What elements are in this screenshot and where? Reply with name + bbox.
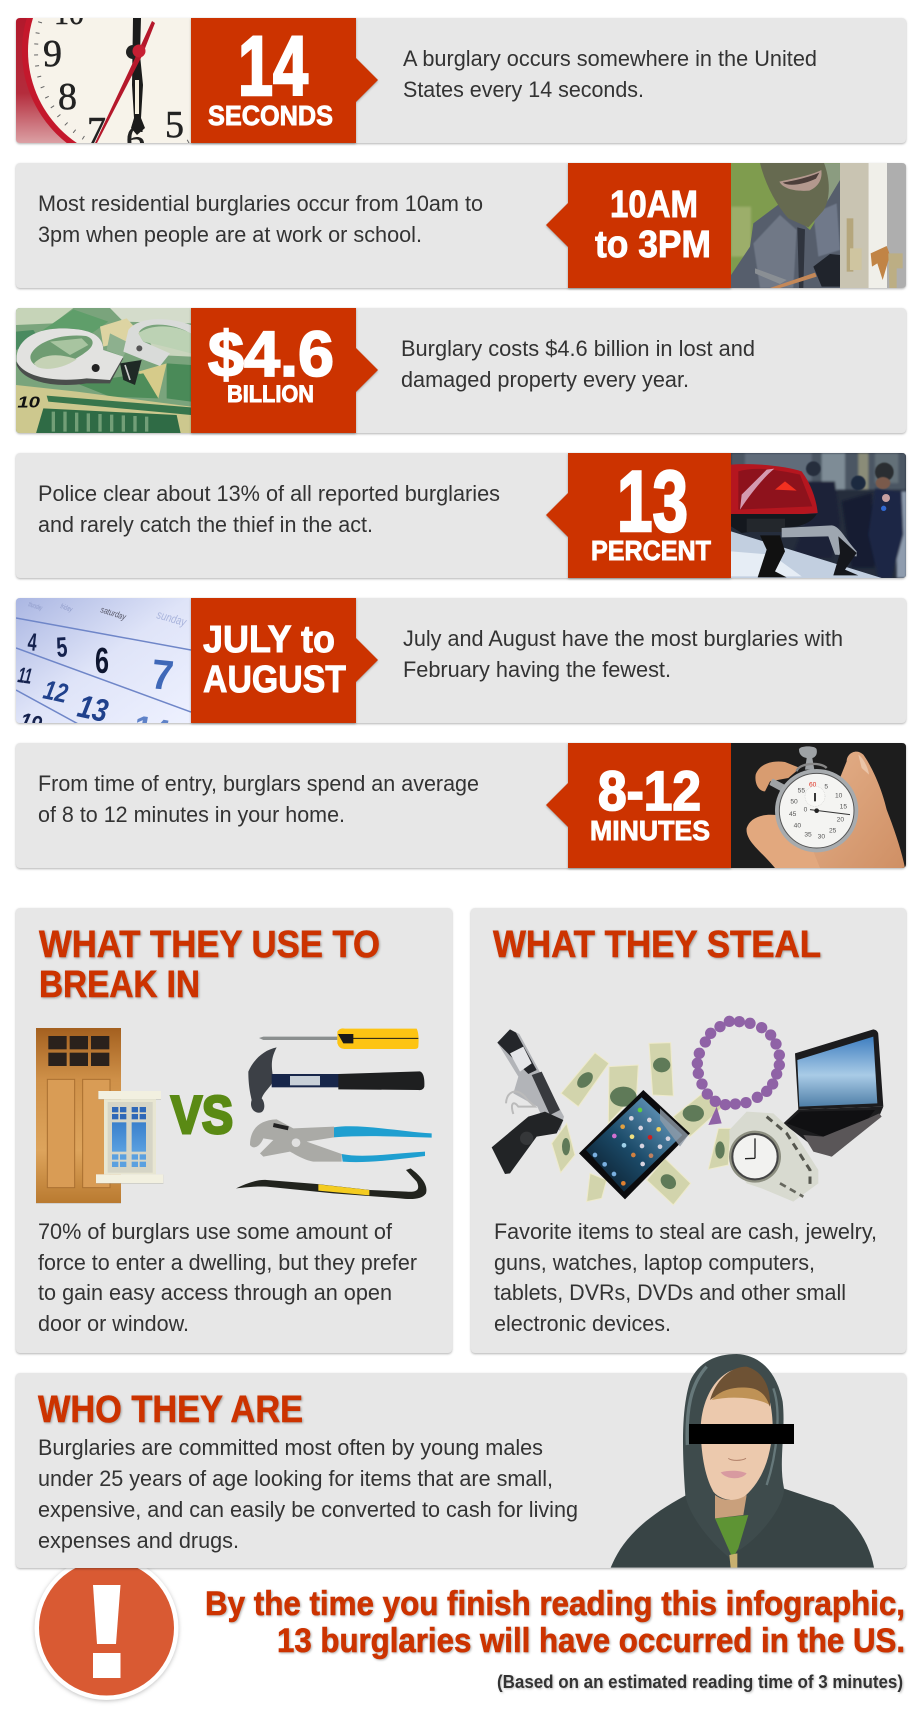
photo: stopwatch in hand: 35: [804, 831, 812, 838]
badge: 4.6 billion: [191, 308, 378, 433]
photo: calendar page: 19: [17, 708, 45, 739]
text: profile of burglars: expensive, and can easily be converted to cash for living: [38, 1497, 578, 1522]
text: time of day: 3pm when people are at work or school.: [38, 222, 422, 247]
photo: stopwatch in hand: 40: [794, 822, 801, 829]
photo: stopwatch in hand: 55: [798, 788, 805, 795]
text: use of force: [38, 1219, 417, 1336]
badge: 14 seconds: SECONDS: [208, 100, 333, 131]
illustration: stolen items: [492, 1016, 883, 1205]
heading: what they steal: WHAT THEY STEAL: [493, 924, 821, 966]
text: burglary frequency: States every 14 seconds.: [403, 77, 644, 102]
icon: exclamation circle: [34, 1556, 178, 1700]
text: peak months: July and August have the most burglaries with: [403, 626, 843, 651]
text: cost of burglary: Burglary costs $4.6 billion in lost and: [401, 336, 755, 361]
photo: stopwatch in hand: 60: [809, 781, 817, 788]
photo: handcuffs on money: [16, 308, 191, 433]
photo: stopwatch in hand: 30: [818, 834, 825, 841]
text: peak months: [403, 626, 843, 682]
text: favourite items: electronic devices.: [494, 1311, 671, 1336]
photo: masked burglar at door: [731, 163, 906, 288]
photo: calendar page: 11: [16, 662, 34, 689]
text: time of day: Most residential burglaries occur from 10am to: [38, 191, 483, 216]
text: favourite items: guns, watches, laptop computers,: [494, 1250, 815, 1275]
photo: stopwatch in hand: 45: [789, 811, 797, 818]
badge: 8-12 minutes: 8-12: [598, 759, 701, 822]
text: police clearance: Police clear about 13% of all reported burglaries: [38, 481, 500, 506]
text: police clearance: and rarely catch the thief in the act.: [38, 512, 373, 537]
photo: police light and officers: [731, 453, 907, 578]
badge: 8-12 minutes: [546, 743, 731, 868]
photo: calendar page: sunday: [155, 607, 189, 629]
photo: red wall clock: 5: [165, 104, 184, 146]
heading: who they are: WHO THEY ARE: [38, 1389, 303, 1431]
text: time inside home: of 8 to 12 minutes in your home.: [38, 802, 345, 827]
text: vs: VS: [171, 1086, 233, 1145]
badge: 10am to 3pm: to 3PM: [595, 224, 711, 266]
text: cost of burglary: [401, 336, 755, 392]
panel: 4.6 billion: [16, 308, 906, 433]
photo: red wall clock: 6: [126, 119, 145, 161]
photo: calendar page: 5: [55, 631, 68, 663]
panel: who they are: [16, 1354, 906, 1568]
photo: calendar page: 4: [26, 628, 38, 657]
photo: stopwatch in hand: [731, 743, 906, 868]
text: profile of burglars: under 25 years of age looking for items that are small,: [38, 1466, 553, 1491]
text: time of day: [38, 191, 483, 247]
text: burglary frequency: A burglary occurs somewhere in the United: [403, 46, 817, 71]
text: use of force: 70% of burglars use some amount of: [38, 1219, 393, 1244]
badge: 10am to 3pm: [546, 163, 731, 288]
callout: reading time headline: [205, 1585, 905, 1692]
photo: calendar page: 7: [149, 650, 176, 699]
panel: 8-12 minutes: [16, 743, 906, 868]
badge: 4.6 billion: BILLION: [227, 381, 314, 408]
photo: calendar page: thursday: [27, 601, 43, 612]
photo: stopwatch in hand: 50: [790, 799, 798, 806]
badge: 14 seconds: [191, 18, 378, 143]
text: use of force: force to enter a dwelling, but they prefer: [38, 1250, 417, 1275]
photo: red wall clock: [16, 18, 191, 143]
photo: stopwatch in hand: 5: [824, 784, 828, 791]
photo: calendar page: 6: [95, 640, 109, 681]
text: profile of burglars: Burglaries are committed most often by young males: [38, 1435, 543, 1460]
badge: 10am to 3pm: 10AM: [610, 184, 698, 226]
text: use of force: door or window.: [38, 1311, 189, 1336]
text: profile of burglars: [38, 1435, 578, 1553]
text: time inside home: From time of entry, burglars spend an average: [38, 771, 479, 796]
note: reading time estimate: (Based on an estimated reading time of 3 minutes): [497, 1672, 903, 1692]
badge: 13 percent: 13: [617, 454, 688, 550]
text: profile of burglars: expenses and drugs.: [38, 1528, 239, 1553]
photo: red wall clock: 9: [43, 33, 62, 75]
photo: handcuffs on money: 10: [17, 394, 41, 411]
text: favourite items: Favorite items to steal are cash, jewelry,: [494, 1219, 877, 1244]
text: use of force: to gain easy access through an open: [38, 1280, 392, 1305]
badge: 4.6 billion: $4.6: [208, 318, 334, 390]
photo: calendar page: [16, 598, 191, 723]
illustration: burglary tools: [236, 1028, 432, 1199]
photo: calendar page: 14: [131, 708, 173, 752]
panel: what they use to break in: [16, 908, 452, 1353]
text: police clearance: [38, 481, 500, 537]
photo: stopwatch in hand: 25: [829, 827, 837, 834]
text: favourite items: [494, 1219, 877, 1336]
illustration: door and window: [36, 1028, 163, 1203]
heading: what they use: BREAK IN: [39, 964, 200, 1006]
heading: what they use: [39, 924, 380, 1006]
photo: red wall clock: 8: [58, 76, 77, 118]
photo: stopwatch in hand: 0: [804, 806, 808, 813]
photo: hooded young man: [611, 1354, 874, 1568]
badge: 8-12 minutes: MINUTES: [590, 815, 710, 846]
heading: what they use: WHAT THEY USE TO: [39, 924, 380, 966]
panel: 13 percent: [16, 453, 907, 578]
photo: stopwatch in hand: 10: [835, 792, 843, 799]
photo: calendar page: friday: [59, 603, 73, 614]
photo: stopwatch in hand: 15: [840, 804, 847, 811]
photo: calendar page: saturday: [99, 604, 128, 622]
text: time inside home: [38, 771, 479, 827]
badge: 13 percent: [546, 453, 731, 578]
photo: red wall clock: 7: [87, 110, 106, 152]
panel: 10am to 3pm: [16, 163, 906, 288]
badge: july to august: AUGUST: [203, 659, 346, 701]
panel: july to august: [14, 598, 908, 726]
text: favourite items: tablets, DVRs, DVDs and other small: [494, 1280, 846, 1305]
text: peak months: February having the fewest.: [403, 657, 671, 682]
photo: calendar page: 13: [75, 688, 112, 729]
badge: 14 seconds: 14: [238, 19, 308, 113]
text: cost of burglary: damaged property every year.: [401, 367, 689, 392]
panel: what they steal: [471, 908, 906, 1353]
badge: july to august: JULY to: [203, 619, 335, 661]
badge: july to august: [191, 598, 378, 723]
panel: 14 seconds: [14, 18, 908, 146]
badge: 13 percent: PERCENT: [591, 535, 711, 566]
photo: calendar page: 12: [41, 675, 70, 709]
photo: stopwatch in hand: 20: [837, 816, 844, 823]
text: burglary frequency: [403, 46, 817, 102]
